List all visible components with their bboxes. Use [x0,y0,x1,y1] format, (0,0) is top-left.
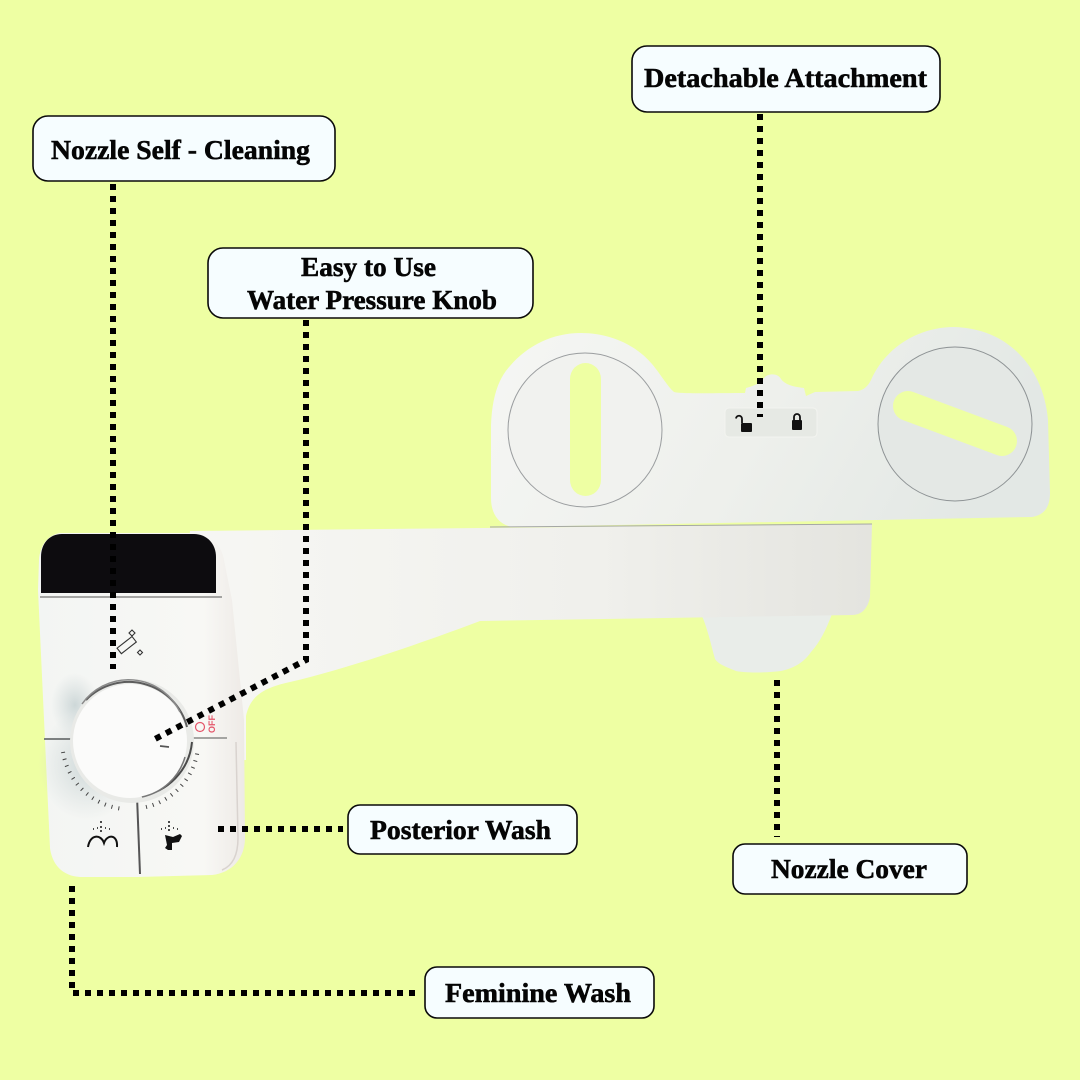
callout: Easy to Use Water Pressure Knob: Water Pressure Knob [247,285,497,315]
knob [70,679,194,803]
connector: nozzle cover [774,680,780,837]
icon: posterior wash [161,821,182,850]
icon: nozzle cleaning [117,630,142,655]
connector: water pressure knob [155,320,306,739]
callout: Nozzle Self - Cleaning: Nozzle Self - Cleaning [51,135,311,165]
nozzle cover [702,614,832,672]
connector: detachable attachment [757,114,763,417]
callout: Easy to Use Water Pressure Knob [208,248,533,318]
callout: Detachable Attachment [632,46,940,112]
control panel [38,533,245,877]
connector: feminine wash [72,886,416,993]
callout: Posterior Wash: Posterior Wash [370,815,551,845]
callout: Feminine Wash: Feminine Wash [445,978,631,1008]
callout: Detachable Attachment: Detachable Attachment [644,63,927,93]
dial ticks [63,748,198,809]
mounting plate [491,327,1050,527]
off mark: OFF [207,715,217,733]
callout: Easy to Use Water Pressure Knob: Easy to Use [301,252,436,282]
callout: Nozzle Cover: Nozzle Cover [771,854,927,884]
off mark [196,715,217,733]
callout: Nozzle Self - Cleaning [33,116,335,181]
callout: Feminine Wash [425,967,654,1018]
arm [180,524,872,760]
display window [41,534,216,593]
product: bidet attachment [38,327,1050,877]
callout: Nozzle Cover [733,844,967,894]
callout: Posterior Wash [348,805,577,854]
lock label [725,408,817,437]
icon: feminine wash [88,821,117,847]
connector: nozzle self-cleaning [110,184,116,669]
connector: posterior wash [218,826,343,832]
